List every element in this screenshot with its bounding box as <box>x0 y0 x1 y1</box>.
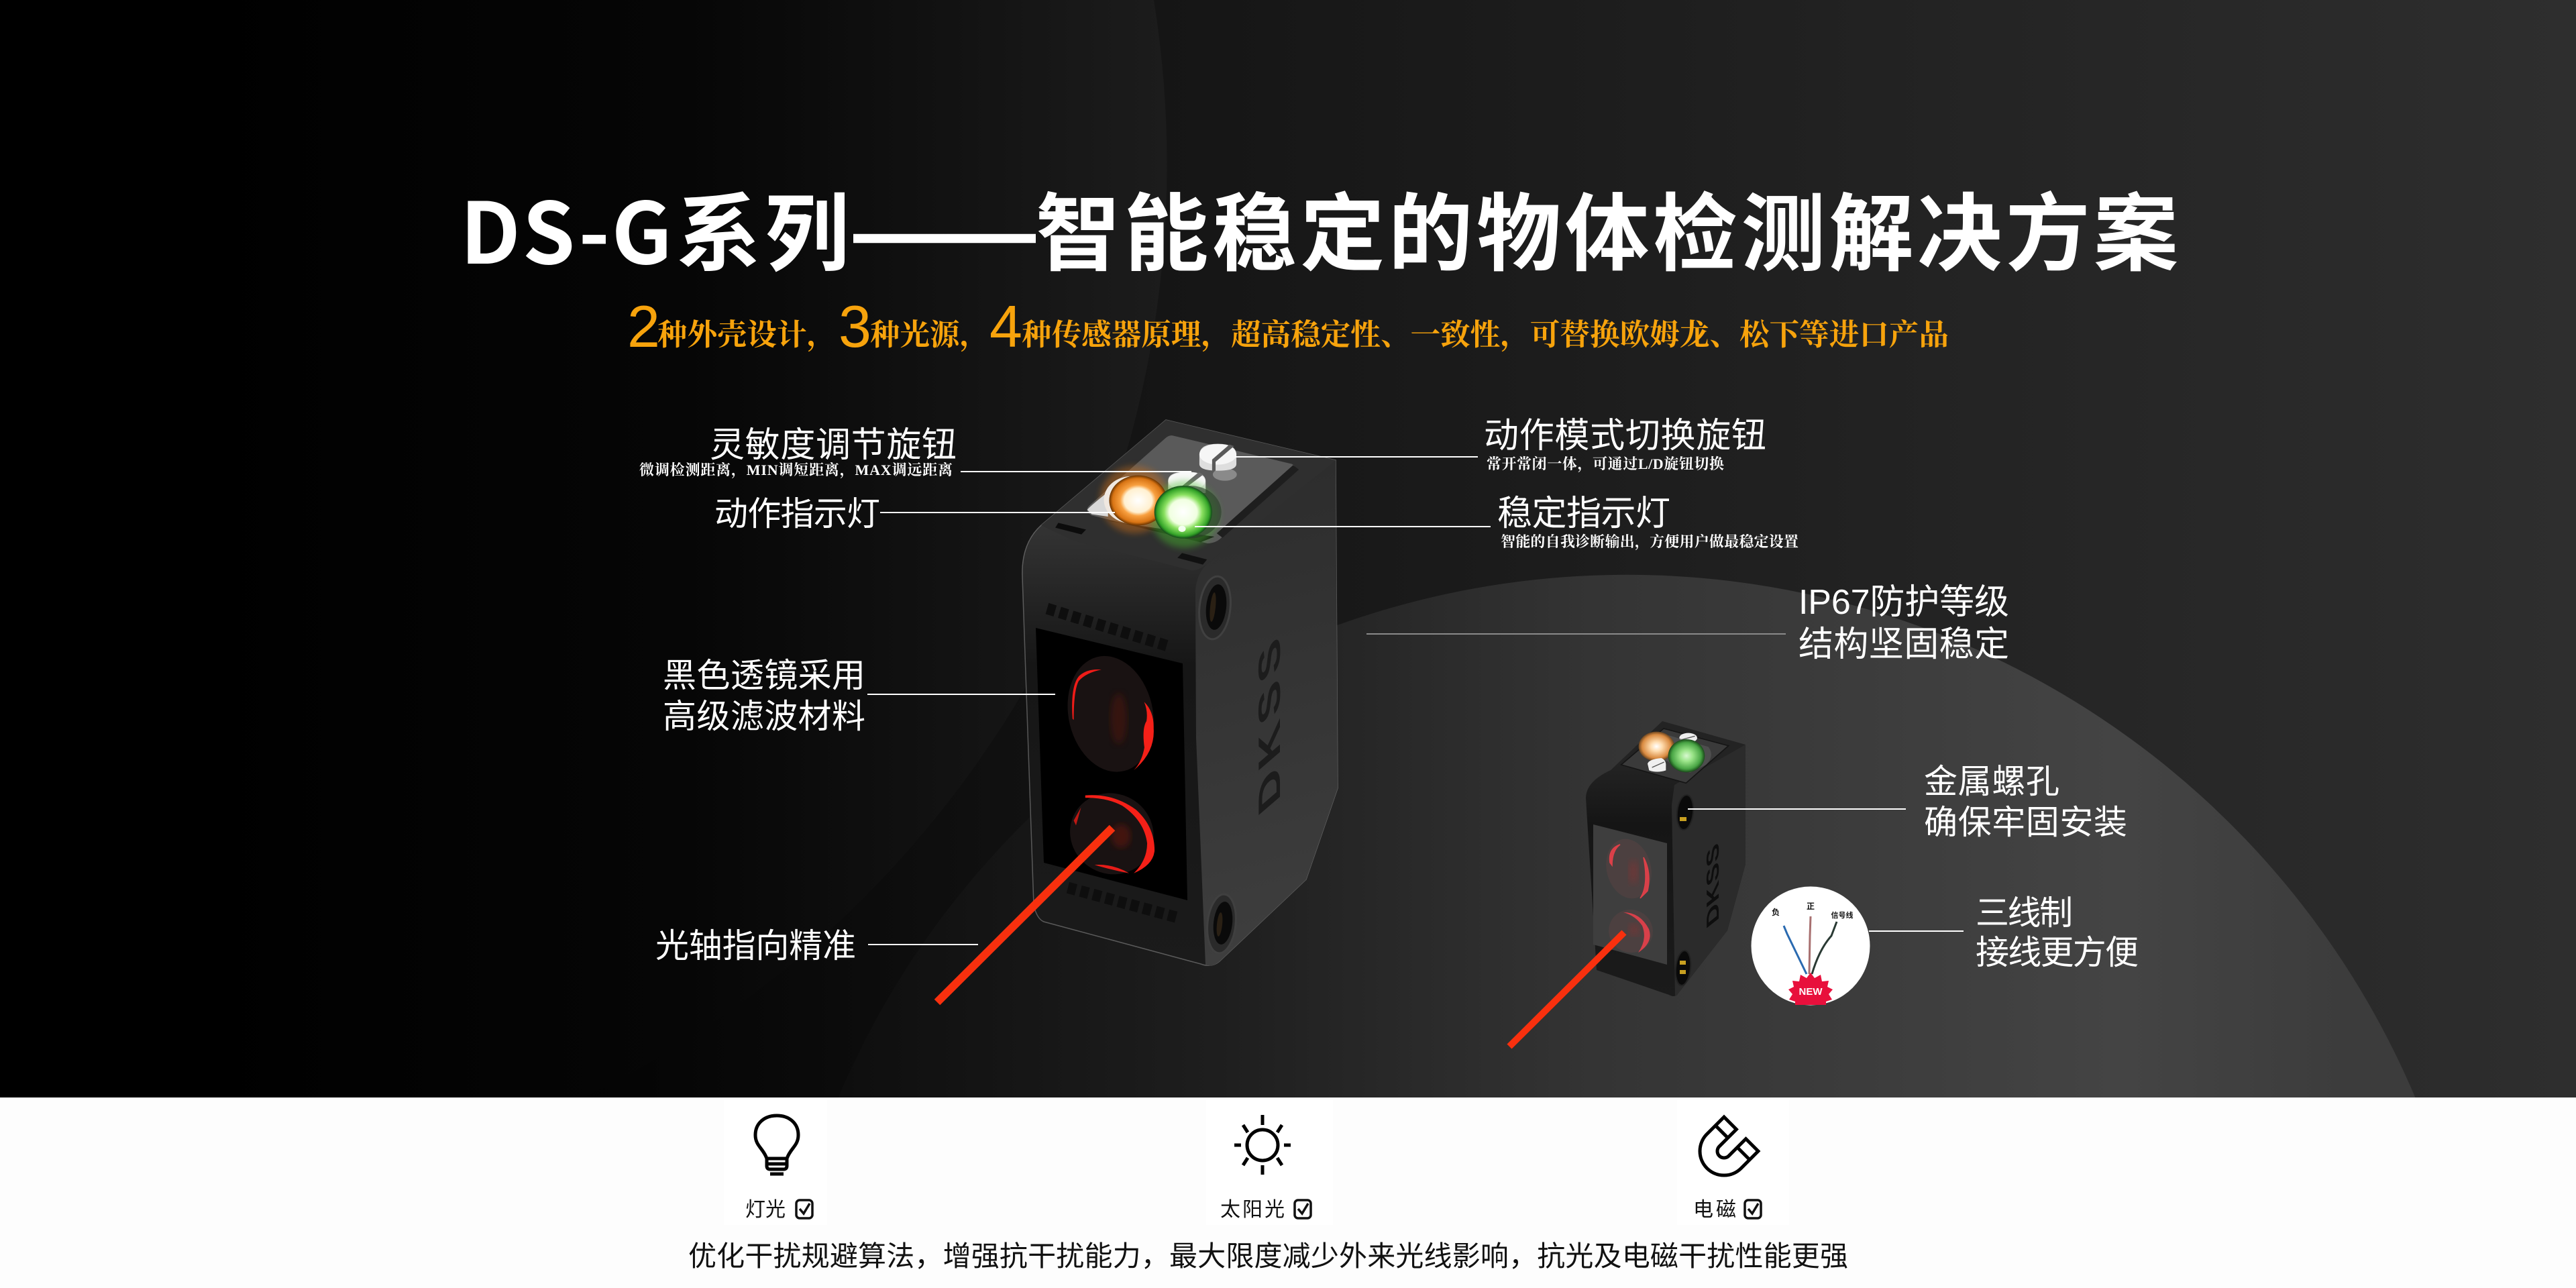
title: DS-G <box>460 166 672 288</box>
callout: action indicator: 动作指示灯 <box>714 495 880 533</box>
label: lamp <box>745 1199 812 1221</box>
knob A <box>1199 444 1236 471</box>
label: electromagnetic <box>1693 1199 1761 1221</box>
subtitle <box>627 293 1949 360</box>
callout: stable indicator: 稳定指示灯 <box>1497 494 1670 533</box>
small window <box>1593 824 1667 965</box>
callout: IP67: 结构坚固稳定 <box>1799 625 2009 664</box>
laser beam small <box>1509 932 1624 1046</box>
callout: stable indicator: 智能的自我诊断输出，方便用户做最稳定设置 <box>1501 533 1799 551</box>
wiring circle: 正 <box>1807 902 1815 911</box>
callout: sensitivity knob: 灵敏度调节旋钮 <box>710 426 957 465</box>
orange LED <box>1109 476 1167 525</box>
callout: sensitivity knob: 微调检测距离，MIN调短距离，MAX调远距离 <box>639 462 953 479</box>
callout: mode knob <box>1235 417 1766 473</box>
callout: metal thread: 金属螺孔 <box>1924 763 2059 800</box>
main sensor <box>1022 420 1338 966</box>
small holes <box>1674 794 1695 986</box>
icon: magnet <box>1690 1117 1758 1185</box>
callout: IP67: IP67防护等级 <box>1799 583 2009 622</box>
label: electromagnetic: 电磁 <box>1693 1199 1736 1221</box>
LEDs <box>1087 466 1222 548</box>
callout: mode knob: 动作模式切换旋钮 <box>1484 417 1766 455</box>
lens window <box>1036 628 1187 900</box>
small brand mark: DKSS <box>1703 838 1723 933</box>
wiring circle <box>1751 887 1870 1005</box>
label: lamp: 灯光 <box>745 1199 786 1221</box>
top details <box>1055 435 1299 565</box>
sensor body <box>1022 420 1338 965</box>
NEW badge: NEW <box>1799 986 1823 998</box>
lenses <box>1047 608 1178 918</box>
label: sunlight: 太阳光 <box>1220 1199 1285 1221</box>
small sensor <box>1586 721 1746 996</box>
subtitle: 4 <box>989 293 1022 360</box>
callout: stable indicator <box>1195 494 1799 551</box>
small sensor side <box>1672 745 1746 996</box>
title: 系列 <box>676 166 849 288</box>
bottom band <box>0 1097 2576 1288</box>
small sensor body <box>1586 721 1746 996</box>
bottom description: 优化干扰规避算法，增强抗干扰能力，最大限度减少外来光线影响，抗光及电磁干扰性能更强 <box>688 1240 1848 1272</box>
small lenses <box>1600 834 1658 959</box>
laser beam main <box>937 828 1112 1002</box>
callout: sensitivity knob <box>639 426 1191 479</box>
sensor side face <box>1195 460 1338 966</box>
sensor top face <box>1041 420 1336 570</box>
icon: sun <box>1234 1115 1291 1175</box>
knob B <box>1168 472 1205 493</box>
callout: three wire: 三线制 <box>1976 894 2073 932</box>
subtitle: 种光源， <box>870 318 989 352</box>
title: —— <box>853 180 1036 282</box>
wiring circle: 负 <box>1772 907 1780 917</box>
title: 智能稳定的物体检测解决方案 <box>1036 166 2178 288</box>
callout: metal thread <box>1688 763 2127 841</box>
callout: optical axis: 光轴指向精准 <box>655 927 856 965</box>
green LED <box>1155 486 1212 539</box>
subtitle: 2 <box>627 293 660 360</box>
brand mark on side: DKSS <box>1252 628 1287 824</box>
icon: light bulb <box>755 1116 798 1174</box>
callout: black lens: 黑色透镜采用 <box>663 657 865 694</box>
callout: three wire <box>1869 894 2139 971</box>
callout: IP67 <box>1366 583 2009 664</box>
callout: black lens: 高级滤波材料 <box>663 698 865 735</box>
NEW badge <box>1788 973 1833 1005</box>
title <box>460 166 2178 288</box>
callout: metal thread: 确保牢固安装 <box>1924 804 2127 841</box>
callout: three wire: 接线更方便 <box>1976 934 2139 971</box>
subtitle: 种外壳设计， <box>657 318 837 352</box>
callout: mode knob: 常开常闭一体，可通过L/D旋钮切换 <box>1487 455 1724 473</box>
callout: black lens <box>663 657 1055 735</box>
wiring circle: 信号线 <box>1831 910 1853 920</box>
mounting holes <box>1196 575 1238 955</box>
subtitle: 种传感器原理，超高稳定性、一致性，可替换欧姆龙、松下等进口产品 <box>1022 318 1949 352</box>
small top plate and LEDs <box>1621 729 1729 783</box>
subtitle: 3 <box>839 293 871 360</box>
